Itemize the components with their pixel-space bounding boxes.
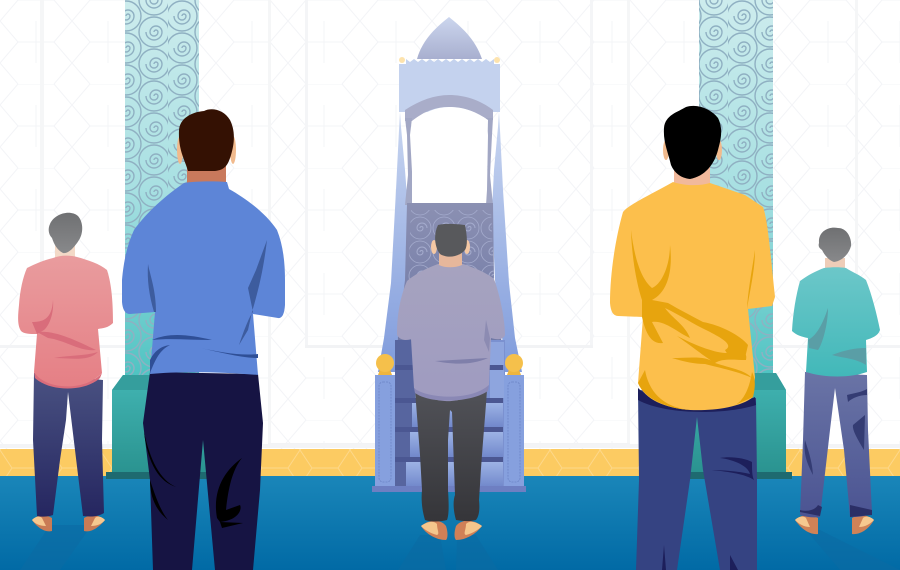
minbar side rails [378,112,408,372]
ears [431,240,437,254]
feet [421,521,448,540]
neck [825,258,845,272]
pants [636,390,757,570]
shirt [397,264,505,401]
neck [674,165,710,187]
jeans [33,373,104,517]
floor shadows [20,525,900,570]
minbar dome [417,17,482,59]
right pillar base [687,373,786,473]
worshipper: pink shirt, left [18,213,113,531]
left pillar base [112,375,208,473]
hair [49,213,82,253]
shirt [18,256,113,388]
blue carpet floor [0,476,900,570]
minbar left pedestal [375,354,395,488]
hair [664,106,721,179]
shirt [792,267,880,376]
feet [32,515,52,531]
feet [795,515,818,534]
jeans [800,372,872,517]
pants [415,390,487,522]
wall [0,0,900,450]
left teal pillar [106,0,210,479]
worshipper: teal shirt, right [792,228,880,534]
ears [663,140,669,160]
minbar canopy [399,59,500,112]
neck [55,245,75,262]
shirt [122,181,285,375]
shirt [610,182,775,410]
worshipper: gray shirt, centre [397,224,505,540]
hair [179,109,234,171]
minbar plinth [372,486,526,492]
right teal pillar [686,0,792,479]
worshipper: yellow shirt, large right [610,106,775,570]
ears [177,136,183,164]
hair [435,224,467,257]
minbar right pedestal [504,354,524,488]
neck [439,248,462,267]
neck [187,165,226,185]
minbar [372,17,526,492]
worshipper: blue shirt, large left [122,109,285,570]
minbar back panel [397,203,502,345]
minbar opening [412,107,488,203]
hair [819,228,851,262]
minbar arch and posts [405,95,493,121]
yellow wall band [0,449,900,477]
minbar stairs [395,340,505,487]
pants [143,372,263,570]
